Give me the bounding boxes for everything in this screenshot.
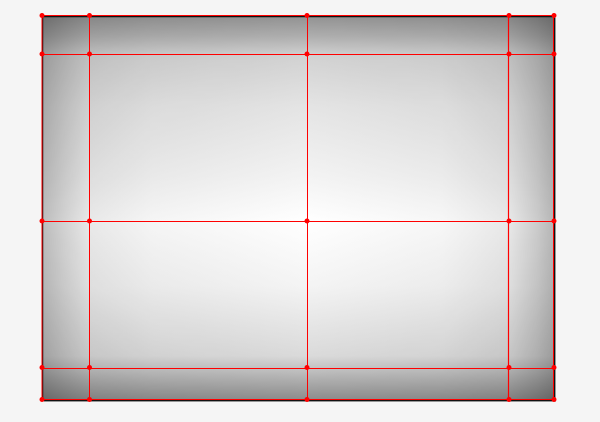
panel: mesh gradient surface [42,16,554,400]
outer black border [42,16,554,400]
mesh control points [40,13,556,402]
horizontal mesh lines [42,16,554,400]
drop shadow [44,18,556,402]
vertical mesh lines [42,15,554,400]
